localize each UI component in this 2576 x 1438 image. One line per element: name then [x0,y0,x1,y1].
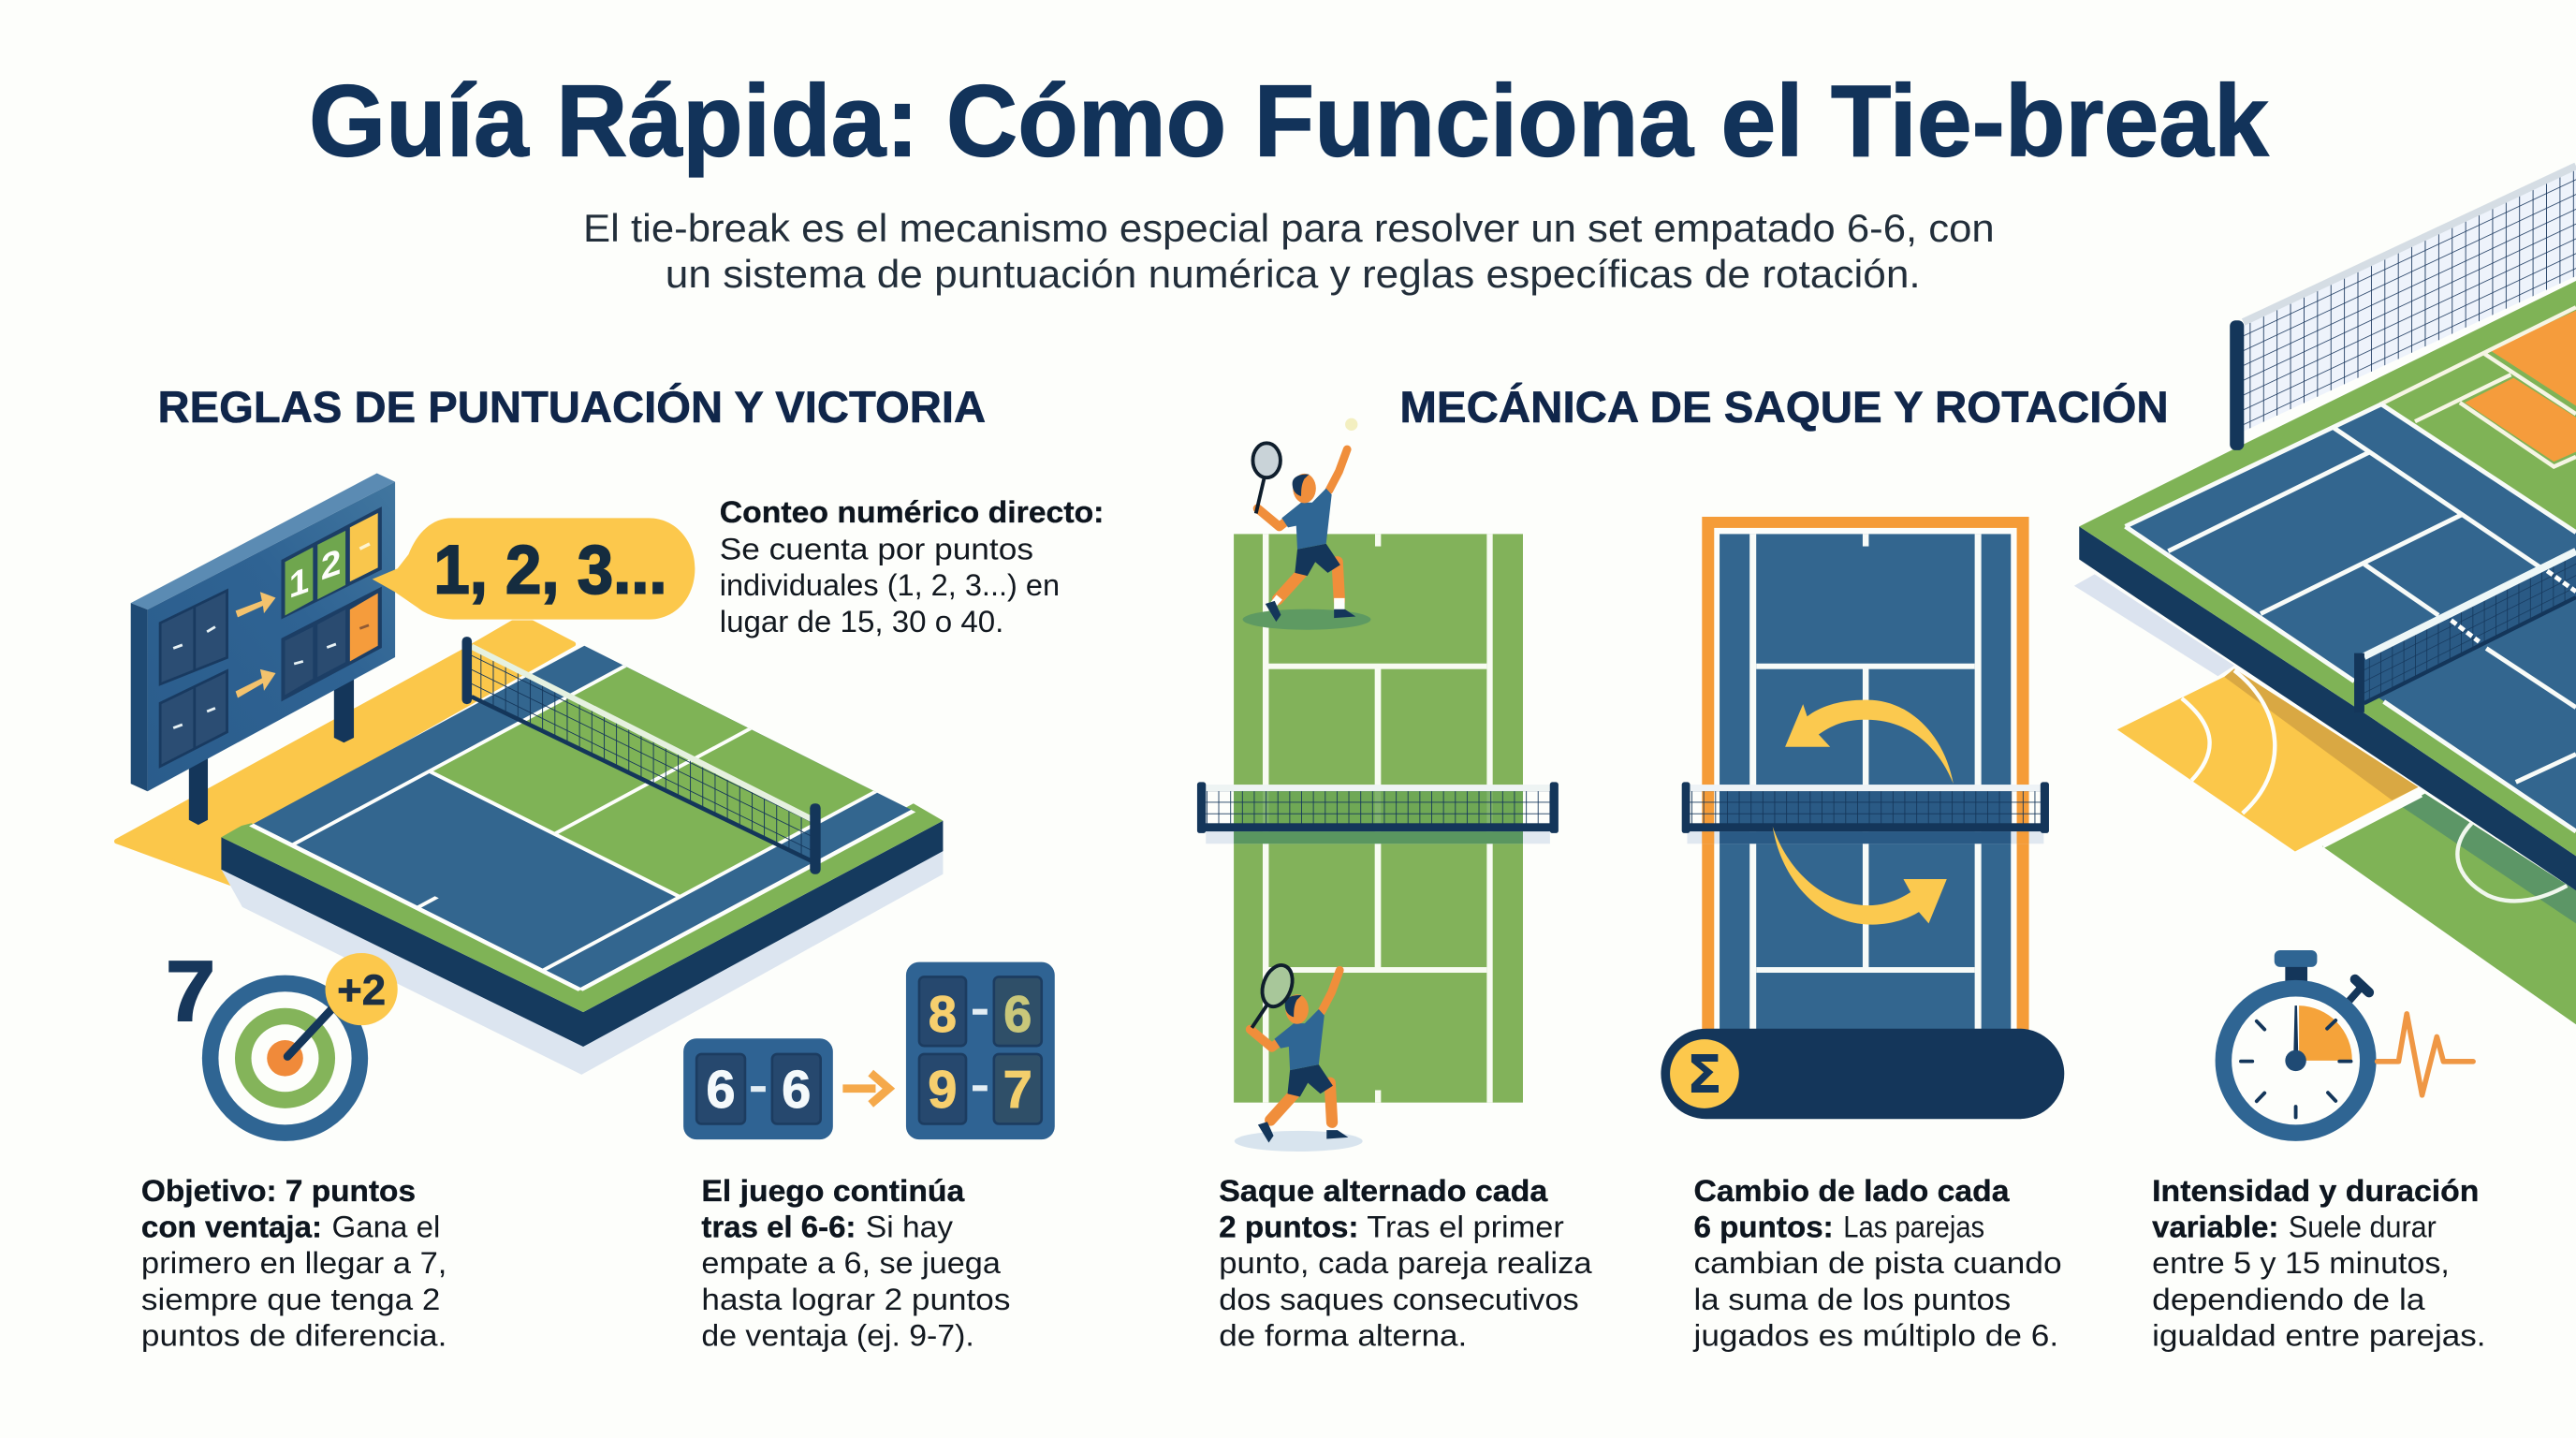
icon: score 6-6 to 9-7 [683,962,1055,1139]
text: objetivo: Objetivo: 7 puntos [141,1173,416,1208]
court surface [249,646,915,992]
text: objetivo [141,1173,446,1352]
text: cambio de lado: 6 puntos: [1694,1210,1834,1244]
text: saque alternado [1219,1173,1593,1352]
text: conteo numerico: Conteo numérico directo: [720,494,1104,529]
text: objetivo: primero en llegar a 7, [141,1245,446,1280]
text: intensidad: Suele durar [2289,1210,2437,1244]
court base side [2079,526,2576,890]
yellow floor [117,623,574,902]
text: objetivo: puntos de diferencia. [141,1317,446,1352]
scoreboard score tiles [281,506,382,701]
court drop shadow [2074,574,2234,676]
scoreboard score tiles: 1 [289,560,309,607]
icon: target seven plus two: 7 [166,944,215,1039]
text: objetivo: siempre que tenga 2 [141,1282,440,1316]
sum pill with sigma [1661,1029,2064,1119]
scoreboard score tiles: 2 [321,541,341,589]
icon: target seven plus two: +2 [337,966,386,1014]
text: objetivo: con ventaja: [141,1210,322,1244]
court green top [2079,281,2576,856]
court drop shadow [221,848,943,1075]
text: intensidad: dependiendo de la [2152,1282,2425,1316]
text: conteo numerico: Se cuenta por puntos [720,532,1033,566]
heading: reglas: REGLAS DE PUNTUACIÓN Y VICTORIA [157,381,986,433]
text: cambio de lado: Cambio de lado cada [1694,1173,2010,1208]
speech bubble 1 2 3: 1, 2, 3... [433,531,667,609]
text: intensidad: igualdad entre parejas. [2152,1317,2485,1352]
heading: mecanica: MECÁNICA DE SAQUE Y ROTACIÓN [1399,381,2169,433]
lower court net [2354,549,2576,712]
text: saque alternado: de forma alterna. [1219,1317,1467,1352]
isometric scoring court and scoreboard [117,473,943,1075]
text: el juego continua: de ventaja (ej. 9-7). [701,1317,974,1352]
arrow [842,1073,889,1104]
far court net [2230,166,2576,450]
text: saque alternado: 2 puntos: [1219,1210,1358,1244]
text: saque alternado: punto, cada pareja realiza [1219,1245,1593,1280]
court white lines [2126,404,2576,831]
text: cambio de lado: la suma de los puntos [1694,1282,2011,1316]
text: intensidad [2152,1173,2485,1352]
speech bubble 1 2 3 [373,518,695,620]
court base [221,821,943,1047]
text: saque alternado: dos saques consecutivos [1219,1282,1579,1316]
sum pill with sigma: Σ [1687,1045,1722,1106]
text: intensidad: variable: [2152,1210,2278,1244]
icon: target seven plus two [166,944,398,1141]
text: conteo numerico: individuales (1, 2, 3...) en [720,567,1060,602]
scoreboard 8-6 9-7: 8 [929,986,957,1043]
text: objetivo: Gana el [332,1210,440,1244]
pulse line [2378,1014,2473,1095]
icon: stopwatch [2223,950,2473,1133]
text: el juego continua [701,1173,1010,1352]
scoreboard 6-6: 6 [706,1060,736,1119]
text: conteo numerico: lugar de 15, 30 o 40. [720,604,1003,638]
rear orange zones [2380,307,2576,466]
text: saque alternado: Tras el primer [1367,1210,1564,1244]
scoreboard 6-6 [683,1038,833,1139]
green floor panel [2322,794,2576,1024]
net [462,637,821,874]
text: el juego continua: empate a 6, se juega [701,1245,1002,1280]
text: intensidad: Intensidad y duración [2152,1173,2479,1208]
subtitle: un sistema de puntuación numérica y reglas específicas de rotación. [666,252,1921,296]
green service court [1197,418,1559,1152]
title: Guía Rápida: Cómo Funciona el Tie-break [309,65,2269,179]
text: el juego continua: hasta lograr 2 puntos [701,1282,1010,1316]
blue rotation court [1661,517,2064,1119]
court green surround [221,803,943,1012]
text: saque alternado: Saque alternado cada [1219,1173,1548,1208]
subtitle: El tie-break es el mecanismo especial para resolver un set empatado 6-6, con [583,206,1995,250]
scoreboard [131,473,395,791]
scoreboard left panels [160,591,227,767]
text: cambio de lado: jugados es múltiplo de 6. [1692,1317,2058,1352]
yellow floor panel [2117,668,2419,851]
blue playing surface [2126,404,2576,831]
text: cambio de lado: Las parejas [1843,1210,1984,1244]
arrow: lower rotation [1773,827,1947,925]
player top [1243,418,1370,630]
blue court net [1682,782,2049,844]
text: conteo numerico [720,494,1104,638]
scoreboard 8-6 9-7: 9 [928,1060,958,1119]
text: cambio de lado: cambian de pista cuando [1694,1245,2062,1280]
text: el juego continua: tras el 6-6: [701,1210,856,1244]
scoreboard posts [189,674,354,825]
scoreboard 8-6 9-7: 6 [1003,986,1032,1043]
arrow: upper rotation [1785,700,1954,784]
green court net [1197,782,1559,844]
subtitle [583,206,1995,296]
large right isometric court [2074,166,2576,1024]
text: el juego continua: Si hay [866,1210,954,1244]
text: cambio de lado [1692,1173,2062,1352]
text: el juego continua: El juego continúa [701,1173,965,1208]
player bottom [1235,961,1363,1152]
text: intensidad: entre 5 y 15 minutos, [2152,1245,2450,1280]
scoreboard 6-6: 6 [782,1060,811,1119]
scoreboard 8-6 9-7: 7 [1003,1060,1032,1119]
scoreboard arrows [237,594,274,697]
scoreboard 8-6 9-7 [906,962,1055,1139]
